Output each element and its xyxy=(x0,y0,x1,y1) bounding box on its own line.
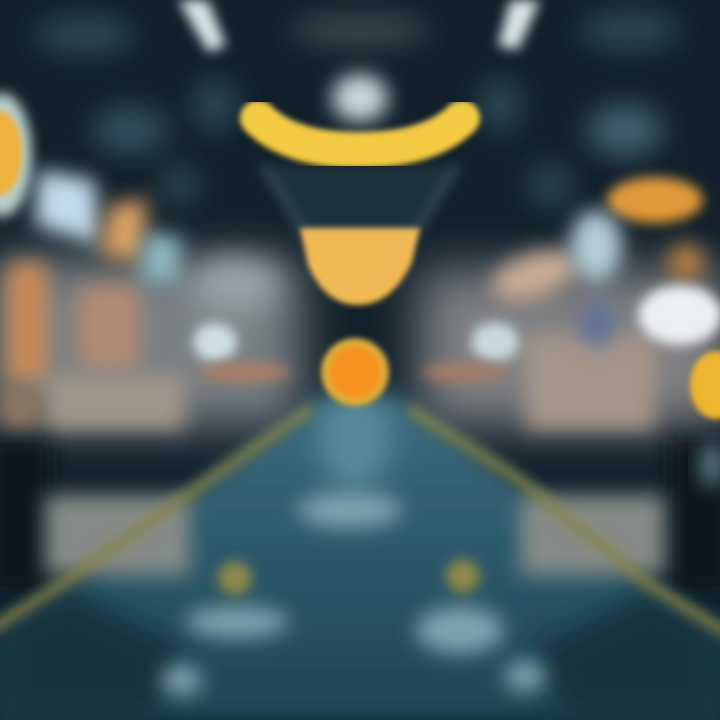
left pallet xyxy=(45,495,190,575)
lower left dark corner xyxy=(0,590,190,720)
ceiling lights xyxy=(178,0,540,52)
floor xyxy=(0,395,720,720)
white glow above funnel xyxy=(332,74,388,122)
floor yellow markers xyxy=(218,559,480,595)
right shelving xyxy=(420,240,720,590)
floor lines right xyxy=(408,408,720,635)
left shelving xyxy=(0,257,300,590)
funnel frame xyxy=(262,165,458,235)
right pallet xyxy=(520,495,665,575)
yellow arc xyxy=(258,118,462,150)
floor pale glow xyxy=(319,392,391,488)
lower right dark corner xyxy=(530,590,720,720)
orange circle xyxy=(321,338,389,406)
right wall icons xyxy=(570,177,720,487)
left wall icons xyxy=(0,93,182,285)
floor text-like patches xyxy=(162,492,545,696)
floor lines left xyxy=(0,408,312,630)
orange trapezoid xyxy=(300,228,420,305)
ceiling fixtures xyxy=(35,10,680,207)
